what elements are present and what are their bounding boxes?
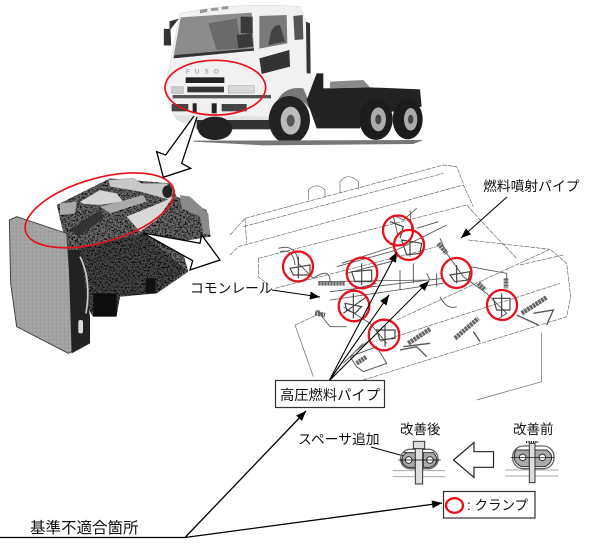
label: before improvement: 改善前 (513, 421, 554, 437)
FUSO logo: FUSO (186, 69, 224, 75)
label: spacer added: スペーサ追加 (298, 432, 380, 447)
front wheels (198, 117, 232, 140)
clamp details (290, 222, 510, 347)
common rail (317, 208, 447, 327)
engine block (57, 178, 211, 317)
mirrors (164, 19, 178, 45)
high pressure pipes (278, 238, 507, 372)
dark lower block (80, 233, 187, 317)
oil filler caps (308, 177, 358, 200)
label: common rail (190, 281, 320, 297)
clamp diagram: after improvement (393, 441, 445, 484)
roof vents (200, 6, 228, 13)
windshield (173, 13, 254, 58)
label: after improvement: 改善後 (400, 421, 441, 437)
label: fuel injection pipe: 燃料噴射パイプ (483, 178, 580, 194)
arrow: truck to engine (157, 116, 197, 177)
top cover (80, 190, 123, 205)
label: non-conforming locations (0, 411, 442, 538)
label: fuel injection pipe (461, 178, 580, 238)
license plate (198, 105, 210, 114)
valve clusters (315, 243, 506, 363)
red ellipse on engine (17, 158, 183, 262)
wheel arch panel (273, 88, 315, 122)
ground shadow (193, 140, 423, 145)
intake pipes (108, 178, 173, 200)
label: common rail: コモンレール (190, 281, 273, 296)
label: spacer added (298, 432, 415, 459)
radiator (9, 217, 75, 353)
legend red circle (446, 498, 463, 513)
red circles: clamp locations (283, 216, 517, 350)
grille and lights (186, 77, 224, 83)
rear rocker covers (230, 165, 517, 285)
front rocker cover (275, 240, 571, 380)
red ellipse on truck (165, 60, 266, 115)
truck cab body (165, 5, 317, 122)
fuel injectors (408, 297, 547, 343)
legend: clamp: : クランプ (467, 498, 529, 513)
arrow: before to after (454, 442, 494, 478)
chassis frame (307, 73, 422, 128)
label: high pressure fuel pipe: 高圧燃料パイプ (280, 386, 381, 404)
legend: clamp (444, 492, 535, 518)
bumper underside (173, 115, 273, 128)
arrow: engine to line drawing (143, 233, 220, 270)
engine line drawing (230, 165, 571, 400)
truck photo (164, 5, 423, 145)
label: high pressure fuel pipe (276, 252, 429, 408)
clamp diagram: before improvement (505, 442, 558, 483)
rear wheels (359, 99, 393, 140)
engine photo (9, 158, 211, 353)
label: non-conforming locations: 基準不適合箇所 (30, 519, 139, 537)
cab side windows (259, 15, 311, 74)
